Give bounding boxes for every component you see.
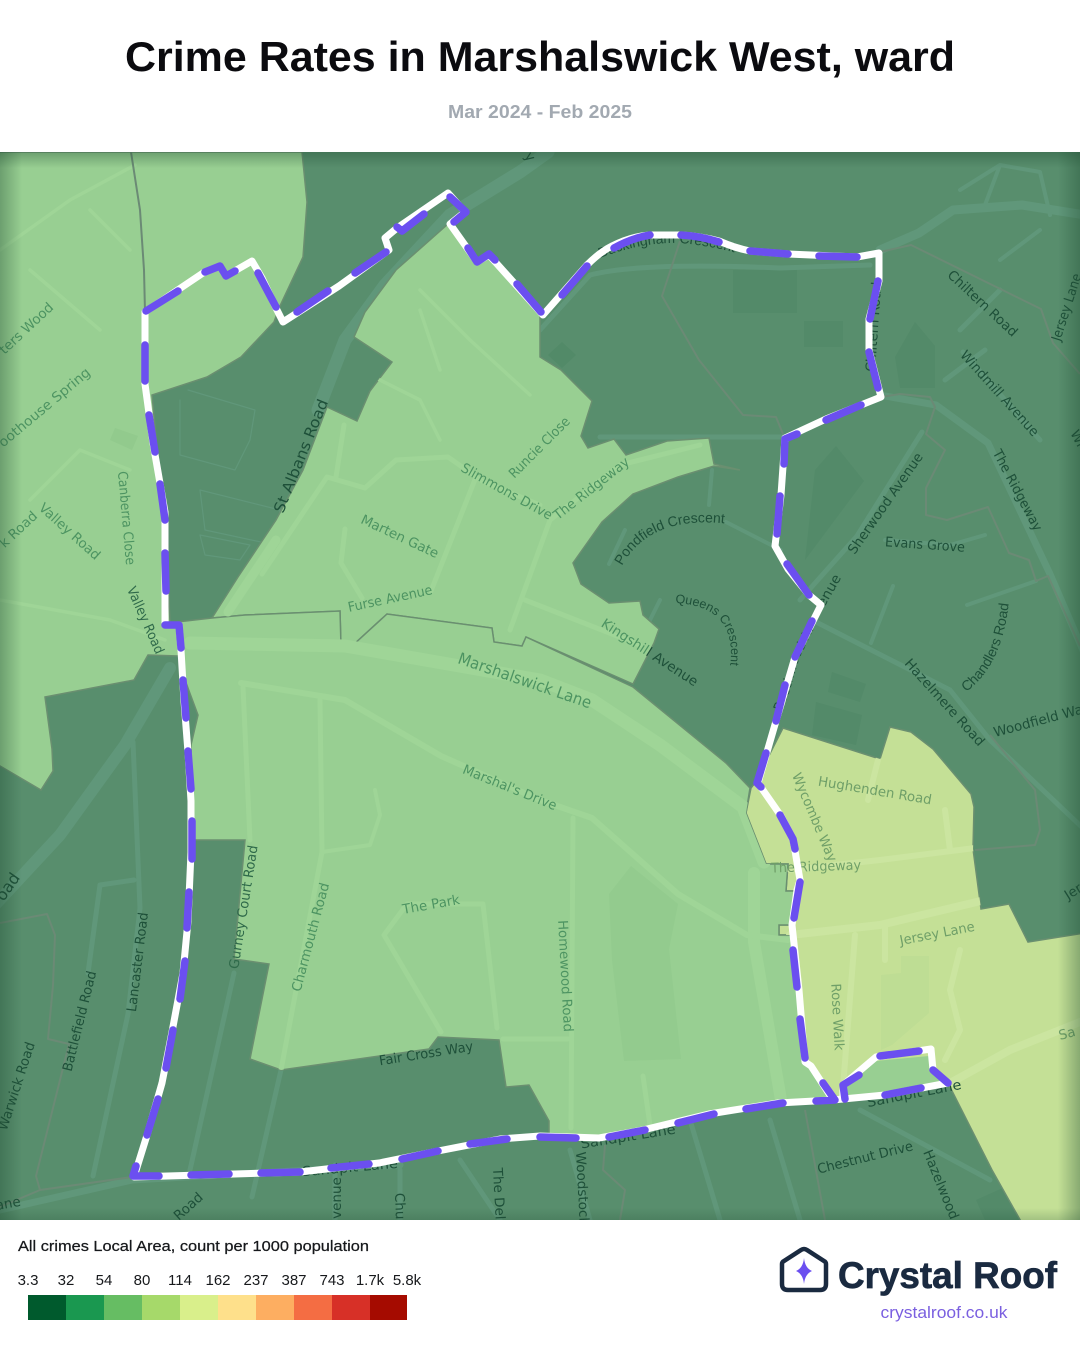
street labels: Jersey Lane bbox=[897, 919, 976, 949]
street labels bbox=[0, 152, 1080, 1220]
street labels: Gurney Court Road bbox=[226, 844, 262, 970]
legend scale values: 54 bbox=[96, 1272, 112, 1289]
street labels: Rose Walk bbox=[827, 983, 847, 1051]
crime rate area: yellow green east bbox=[746, 727, 1080, 1225]
street labels: Furse Avenue bbox=[346, 582, 434, 616]
legend scale values: 1.7k bbox=[356, 1272, 385, 1289]
street labels: Buckingham Crescent bbox=[598, 238, 735, 258]
street labels: Runcie Close bbox=[506, 414, 574, 482]
crime rate area: west light green bbox=[0, 152, 307, 790]
legend title: All crimes Local Area, count per 1000 population bbox=[18, 1238, 369, 1255]
street labels: enue bbox=[814, 572, 845, 610]
street labels: The Dell bbox=[489, 1166, 508, 1224]
street labels: Slimmons Drive bbox=[458, 460, 555, 524]
street labels: Chiltern Road bbox=[863, 281, 885, 372]
street labels: Hughenden Road bbox=[817, 774, 933, 808]
website url: crystalroof.co.uk bbox=[880, 1304, 1008, 1322]
roads on light areas bbox=[226, 378, 780, 1070]
map edge vignette bbox=[0, 152, 1080, 1220]
legend scale values bbox=[18, 1272, 422, 1289]
legend scale values: 114 bbox=[168, 1272, 192, 1289]
street labels: Sandpit Lane bbox=[302, 1156, 399, 1180]
panel: choropleth map bbox=[0, 152, 1080, 1220]
street labels: Pondfield Crescent bbox=[614, 514, 725, 565]
street labels: Canberra Close bbox=[114, 471, 138, 566]
patches on light areas bbox=[110, 428, 929, 1061]
street labels: Road bbox=[171, 1189, 207, 1224]
patches on dark areas bbox=[548, 270, 1020, 1220]
legend scale values: 743 bbox=[319, 1272, 345, 1289]
street labels: Marshalswick Lane bbox=[456, 649, 594, 712]
crime rate area: central north light green bbox=[212, 224, 740, 684]
legend scale values: 237 bbox=[243, 1272, 269, 1289]
street labels: Windmill Avenue bbox=[957, 347, 1042, 440]
ward boundary: white outline with purple dashes bbox=[133, 193, 948, 1177]
subtitle: date range: Mar 2024 - Feb 2025 bbox=[448, 102, 632, 122]
street labels: Valley Road bbox=[123, 584, 167, 657]
street labels: St Albans Road bbox=[270, 397, 332, 515]
icon: house with star bbox=[782, 1249, 826, 1290]
street labels: Kingshill Avenue bbox=[598, 616, 701, 690]
street labels: Sandpit Lane bbox=[866, 1077, 963, 1111]
street labels: Hazelmere Road bbox=[901, 656, 988, 750]
street labels: y bbox=[521, 149, 538, 165]
legend scale values: 387 bbox=[281, 1272, 307, 1289]
street labels: Chiltern Road bbox=[944, 267, 1021, 340]
legend scale values: 5.8k bbox=[393, 1272, 422, 1289]
roads on yellow area bbox=[790, 760, 1080, 1100]
street labels: The Park bbox=[400, 892, 461, 918]
street labels: Battlefield Road bbox=[60, 969, 100, 1073]
street labels: The Ridgeway bbox=[770, 857, 861, 877]
street labels: Sherwood Avenue bbox=[845, 450, 927, 557]
street labels: Sa bbox=[1057, 1024, 1077, 1044]
legend scale values: 80 bbox=[134, 1272, 150, 1289]
logo wordmark: Crystal Roof bbox=[838, 1255, 1058, 1296]
street labels: Marshal's Drive bbox=[460, 762, 559, 814]
legend bbox=[18, 1238, 422, 1320]
street labels: Lancaster Road bbox=[124, 912, 152, 1013]
legend scale values: 32 bbox=[58, 1272, 74, 1289]
street labels: Charmouth Road bbox=[289, 881, 333, 993]
street labels: Valley Road bbox=[35, 500, 103, 563]
street labels: venue bbox=[329, 1177, 345, 1219]
street labels: Chandlers Road bbox=[962, 603, 1008, 690]
crime rate area: central south light green bbox=[177, 611, 833, 1138]
street labels: Woodstock bbox=[572, 1151, 592, 1226]
street labels: Sandpit Lane bbox=[579, 1122, 677, 1152]
boundary lines bbox=[0, 152, 1080, 1220]
street labels: Marten Gate bbox=[358, 512, 441, 562]
street labels: Hazelwood bbox=[919, 1148, 962, 1222]
street labels: The Ridgeway bbox=[550, 454, 633, 524]
street labels: Fair Cross Way bbox=[378, 1039, 474, 1069]
crime rate area: small light green loop bbox=[847, 1056, 940, 1095]
street labels: Evans Grove bbox=[884, 534, 965, 556]
street labels: Chestnut Drive bbox=[816, 1138, 915, 1178]
street labels: Beechwood Av bbox=[773, 629, 814, 708]
title: Crime Rates in Marshalswick West, ward bbox=[125, 33, 955, 80]
legend colour bar bbox=[28, 1295, 407, 1320]
street labels: The Ridgeway bbox=[988, 446, 1045, 534]
street labels: Queens Crescent bbox=[676, 594, 738, 666]
street labels: Wycombe Way bbox=[788, 771, 840, 864]
roads on dark areas bbox=[0, 152, 1080, 1220]
logo: Crystal Roof bbox=[782, 1249, 1058, 1322]
street labels: Homewood Road bbox=[554, 920, 576, 1032]
legend scale values: 162 bbox=[205, 1272, 231, 1289]
legend scale values: 3.3 bbox=[18, 1272, 38, 1289]
street labels: Chu bbox=[391, 1193, 408, 1220]
